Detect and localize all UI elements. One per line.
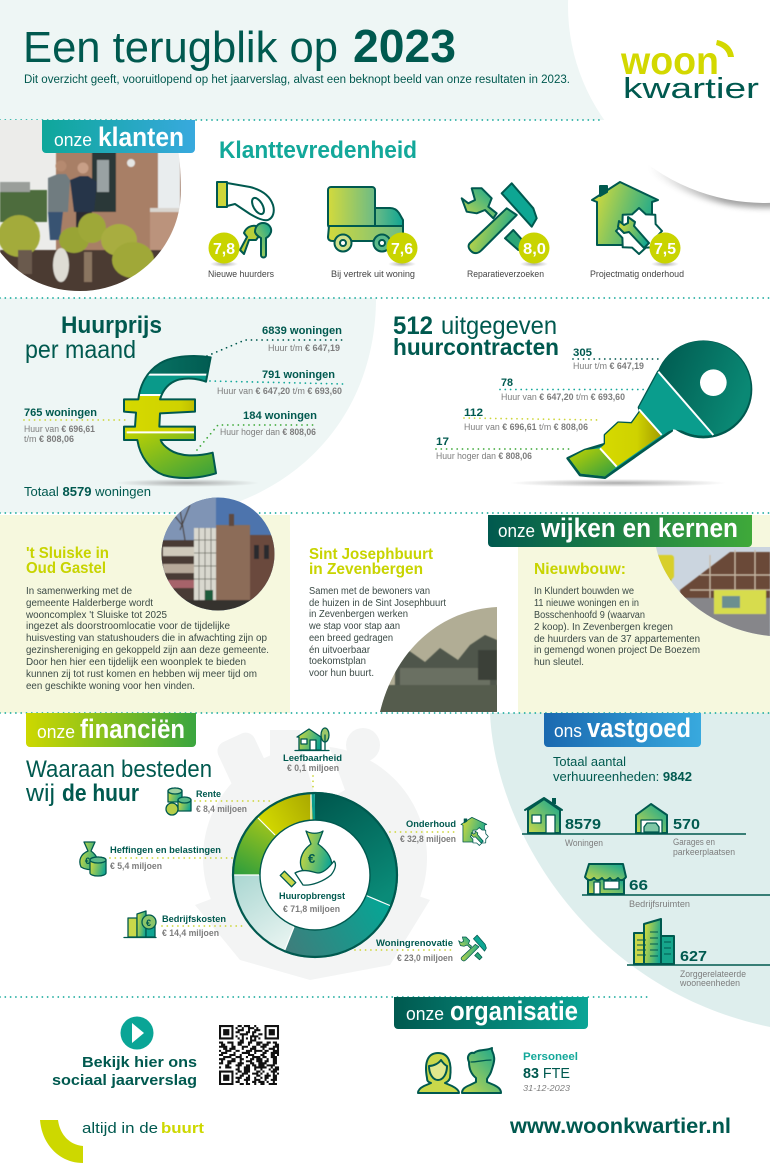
icon: hand with keys [217,182,274,258]
icon: segmented key [568,341,751,478]
label: woningrenovatie [355,935,486,963]
slogan [82,1120,204,1137]
heading: 512 uitgegeven huurcontracten: huurcontracten [393,334,559,360]
panel background: huurprijs [0,298,376,513]
icon: garage with car [636,804,667,833]
heading: Sint Josephbuurt: in Zevenbergen [309,561,423,578]
property: zorggerelateerde wooneenheden: wooneenheden [679,978,740,988]
rent band: 184 woningen [197,410,317,450]
rent band: 184 woningen: 184 woningen [243,410,317,422]
slogan arc [40,1120,83,1163]
text block: Sint Josephbuurt in Zevenbergen [308,546,446,679]
label: nieuwe huurders: Nieuwe huurders [208,269,274,279]
body: t Sluiske: gezinshereniging en gekoppeld zijn aan deze gemeente. [26,645,269,656]
tag: onze financien: onze [37,722,75,742]
property: bedrijfsruimten: 66 [629,877,648,894]
property: woningen: 8579 [565,816,601,833]
website: www.woonkwartier.nl [509,1115,731,1138]
title: Een terugblik op [23,23,338,72]
tag: onze financien: financiën [80,714,185,744]
donut center label: € 71,8 miljoen [283,904,340,914]
label: rente: € 8,4 miljoen [196,804,247,814]
call to action: sociaal jaarverslag: Bekijk hier ons [82,1054,197,1071]
icon: play button [120,1016,154,1050]
rent band: 765 woningen [24,407,130,444]
body: t Sluiske: In samenwerking met de [26,586,132,597]
body: Nieuwbouw: Bosschenhoofd 9 (waarvan [534,610,645,621]
property: zorggerelateerde wooneenheden: Zorggerelateerde [680,969,746,979]
panel background: wijken left [0,515,290,713]
tag: ons vastgoed: vastgoed [587,713,691,743]
icon: man [462,1048,501,1093]
property: garages: parkeerplaatsen [673,847,735,857]
heading: waaraan besteden wij de huur: Waaraan besteden [26,756,212,783]
score: 7,5: 7,5 [654,241,676,258]
contracts: 17: Huur hoger dan € 808,06 [436,451,532,461]
total units: Totaal aantal [553,755,626,769]
body: t Sluiske: gemeente Halderberge wordt [26,598,153,609]
icon: money bag on hand [280,831,335,887]
tag: onze klanten: klanten [98,122,184,152]
property: garages: 570 [673,816,700,833]
call to action: sociaal jaarverslag [52,1054,197,1089]
heading: 512 uitgegeven huurcontracten: uitgegeven [441,312,557,340]
body: Sint Josephbuurt: én uitvoerbaar [309,645,371,656]
contracts: 112: Huur van € 696,61 t/m € 808,06 [464,422,588,432]
heading: huurprijs per maand: per maand [25,336,136,364]
heading: waaraan besteden wij de huur: de huur [62,780,139,807]
body: Sint Josephbuurt: in Zevenbergen werken [309,609,408,620]
rent band: 791 woningen [210,369,343,396]
body: Nieuwbouw: 2 koop). In Zevenbergen kregen [534,622,673,633]
rent band: 765 woningen: 765 woningen [24,407,97,419]
body: t Sluiske: kunnen zij tot rust komen en hebben wij meer tijd om [26,669,257,680]
text block: Nieuwbouw [534,561,700,668]
donut center label: Huuropbrengst [279,891,346,902]
tag: onze wijken en kernen: wijken en kernen [540,513,738,543]
tag: onze klanten [42,120,195,153]
property: garages [636,804,735,857]
label: bedrijfskosten: € 14,4 miljoen [162,928,219,938]
heading: t Sluiske [26,545,109,577]
label: onderhoud: Onderhoud [406,819,456,830]
satisfaction item: bij vertrek uit woning [328,187,418,279]
photo: t Sluiske building [160,496,278,615]
contracts: 78 [500,377,645,402]
satisfaction item: projectmatig onderhoud [590,182,684,279]
body: Nieuwbouw: 11 nieuwe woningen en in [534,598,639,609]
logo panel: white circle [568,0,770,203]
score: 8,0: 8,0 [523,241,546,258]
slogan: altijd in de [82,1120,158,1137]
body: Nieuwbouw [534,586,700,668]
heading: Sint Josephbuurt [309,546,434,578]
rent band: 791 woningen: 791 woningen [262,369,335,381]
icon: buildings [634,919,674,964]
icon: house with gear small [461,817,488,845]
contracts: 305 [573,347,660,371]
icon: money bag and coins [80,842,106,876]
personnel stats: Personeel [523,1051,578,1063]
tag: onze klanten: onze [54,130,92,150]
rent band: 791 woningen: Huur van € 647,20 t/m € 693,60 [217,386,342,396]
logo woonkwartier [620,40,759,105]
label: leefbaarheid: Leefbaarheid [283,753,342,764]
label: leefbaarheid: € 0,1 miljoen [287,763,339,773]
label: heffingen en belastingen: Heffingen en belastingen [110,845,221,856]
rent band: 765 woningen: Huur van € 696,61 [24,424,95,434]
label: heffingen en belastingen: € 5,4 miljoen [110,861,162,871]
rent band: 6839 woningen: Huur t/m € 647,19 [268,343,340,353]
body: Sint Josephbuurt: toekomstplan [309,656,366,667]
tag: onze wijken en kernen [488,513,752,547]
personnel stats: 31-12-2023 [523,1084,571,1093]
label: heffingen en belastingen [80,842,232,876]
contracts: 305: Huur t/m € 647,19 [573,361,644,371]
background gear watermark [195,728,430,980]
property: woningen [525,798,603,848]
icon: wrench and hammer [462,183,537,253]
tag: onze financien [26,713,196,747]
body: Sint Josephbuurt: voor hun buurt. [309,668,374,679]
photo: historic houses Zevenbergen [378,605,498,715]
subtitle: Dit overzicht geeft, vooruitlopend op het jaarverslag, alvast een beknopt beeld van onze resultaten in 2023. [24,74,570,86]
heading: huurprijs per maand [25,312,162,364]
label: rente: Rente [196,789,221,800]
contracts: 78: Huur van € 647,20 t/m € 693,60 [501,392,625,402]
icon: two people [418,1048,501,1093]
total units [553,755,692,784]
baseline rules [522,834,770,965]
icon: house [525,798,562,833]
rent band: 6839 woningen: 6839 woningen [262,325,342,337]
rent band: 6839 woningen [207,325,343,356]
icon: segmented euro sign [120,353,220,481]
icon: house with gear [592,182,662,254]
photo: klanten at front door [0,118,190,295]
logo woonkwartier: woon [620,40,719,83]
body: t Sluiske [25,586,269,692]
satisfaction item: nieuwe huurders [208,182,274,279]
key shadow [510,479,726,487]
label: woningrenovatie: € 23,0 miljoen [397,953,453,963]
heading: waaraan besteden wij de huur [25,756,212,807]
label: onderhoud: € 32,8 miljoen [400,834,456,844]
body: t Sluiske: een geschikte woning voor hen vinden. [26,681,195,692]
heading: t Sluiske: 't Sluiske in [26,545,109,562]
title: 2023 [353,20,456,72]
logo panel shadow [657,171,770,212]
property: garages: Garages en [673,837,715,847]
icon: tools small [459,935,486,961]
satisfaction item: reparatieverzoeken [462,183,550,279]
heading: Nieuwbouw: Nieuwbouw: [534,561,626,578]
rent band: 184 woningen: Huur hoger dan € 808,06 [220,427,316,437]
heading: Sint Josephbuurt: Sint Josephbuurt [309,546,434,563]
body: t Sluiske: wooncomplex 't Sluiske tot 2025 [25,610,167,621]
donut center label [279,891,346,914]
header background [0,0,770,120]
logo woonkwartier: kwartier [623,73,759,105]
body: Nieuwbouw: in gemengd wonen project De Boezem [534,645,700,656]
panel background: wijken right [518,515,770,713]
body: Sint Josephbuurt: de huizen in de Sint Josephbuurt [309,598,446,609]
label: bedrijfskosten: Bedrijfskosten [162,914,226,925]
text block: t Sluiske in Oud Gastel [25,545,269,692]
contracts: 17 [436,436,570,461]
label: leefbaarheid [283,728,342,790]
tag: ons vastgoed: ons [554,721,582,741]
body: t Sluiske: ingezet als doorstroomlocatie voor de tijdelijke [26,621,230,632]
call to action: sociaal jaarverslag: sociaal jaarverslag [52,1072,197,1089]
score: 7,6: 7,6 [391,241,413,258]
panel background: vastgoed [490,713,770,1027]
tag: onze wijken en kernen: onze [498,521,535,541]
icon: house and tree [295,728,329,750]
contracts: 112 [464,407,600,432]
property: woningen: Woningen [565,838,603,848]
body: t Sluiske: huisvesting van statushouders die in afwachting zijn op [26,633,267,644]
contracts: 305: 305 [573,347,592,359]
tag: onze organisatie [394,996,588,1029]
body: Nieuwbouw: hun sleutel. [534,657,584,668]
body: Sint Josephbuurt: Samen met de bewoners van [309,586,430,597]
heading: 512 uitgegeven huurcontracten: 512 [393,312,433,340]
tag: ons vastgoed [544,713,701,747]
icon: truck [328,187,403,252]
contracts: 78: 78 [501,377,513,389]
heading: t Sluiske: Oud Gastel [26,560,106,577]
donut chart: huuropbrengst [232,792,398,958]
icon: shop [585,864,626,894]
icon: money bag on hand: € [308,851,315,866]
property: bedrijfsruimten [585,864,690,909]
tag: onze organisatie: onze [406,1004,444,1024]
body: Nieuwbouw: de huurders van de 37 appartementen [534,634,700,645]
contracts: 17: 17 [436,436,449,448]
label: reparatieverzoeken: Reparatieverzoeken [467,269,544,279]
contracts: 112: 112 [464,407,483,419]
score: 7,8: 7,8 [213,241,235,258]
label: rente [166,788,270,815]
total units: verhuureenheden: 9842 [553,770,692,784]
heading: huurprijs per maand: Huurprijs [61,312,162,339]
label: bij vertrek uit woning: Bij vertrek uit woning [331,269,415,279]
euro shadow [115,479,259,487]
icon: money bag and coins: € [85,856,90,866]
body: t Sluiske: Door hen hier een tijdelijk een woonplek te bieden [26,657,246,668]
property: zorggerelateerde wooneenheden [634,919,746,988]
heading: 512 uitgegeven huurcontracten [393,312,559,360]
property: bedrijfsruimten: Bedrijfsruimten [629,899,690,909]
title [23,20,456,72]
heading: Klanttevredenheid: Klanttevredenheid [219,137,417,164]
icon: office with euro: € [146,918,151,928]
icon: woman [418,1053,459,1093]
personnel stats [523,1051,578,1093]
heading: waaraan besteden wij de huur: wij [25,780,55,807]
tag: onze organisatie: organisatie [450,996,578,1026]
photo: new build under scaffolding [652,545,770,640]
personnel stats: 83 FTE [523,1065,570,1082]
QR code [219,1025,279,1085]
body: Sint Josephbuurt: we stap voor stap aan [308,621,400,632]
rent band: 765 woningen: t/m € 808,06 [24,434,74,444]
property: zorggerelateerde wooneenheden: 627 [680,948,707,965]
label: woningrenovatie: Woningrenovatie [376,938,453,949]
label: projectmatig onderhoud: Projectmatig onderhoud [590,269,684,279]
label: onderhoud [390,817,488,845]
body: Sint Josephbuurt [308,586,446,679]
body: Nieuwbouw: In Klundert bouwden we [534,586,634,597]
body: Sint Josephbuurt: een breed gedragen [309,633,393,644]
total woningen: Totaal 8579 woningen [24,485,151,499]
slogan: buurt [161,1120,204,1137]
label: bedrijfskosten [124,911,245,938]
icon: coins [166,788,191,815]
